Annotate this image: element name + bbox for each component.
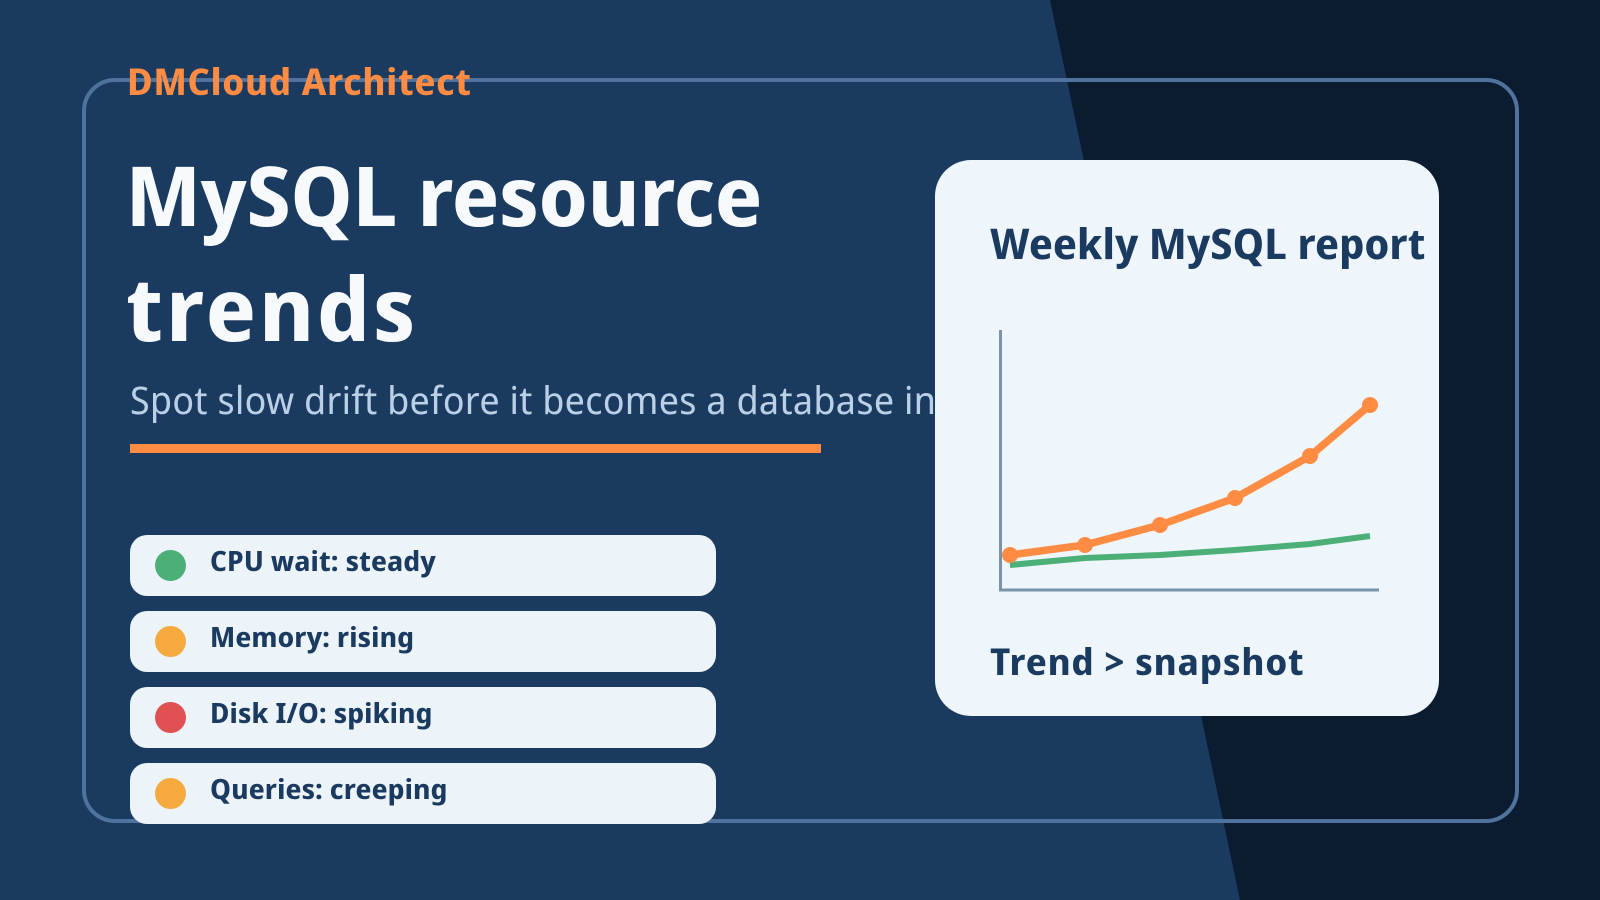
- status row: Memory: Memory: rising: [210, 618, 414, 656]
- card caption: Trend > snapshot: [990, 635, 1304, 686]
- status row: CPU wait: CPU wait: steady: [210, 542, 436, 580]
- line chart: [999, 330, 1379, 592]
- subtitle: Spot slow drift before it becomes a database incident: [130, 374, 1043, 426]
- brand label: DMCloud Architect: [127, 55, 472, 106]
- title line 2: trends: [126, 247, 418, 367]
- accent bar: [130, 444, 821, 453]
- status row: Queries: Queries: creeping: [210, 770, 448, 808]
- status row: Queries: [130, 763, 716, 824]
- status row: CPU wait: [130, 535, 716, 596]
- panel: weekly report card: [935, 160, 1439, 716]
- status row: Memory: [130, 611, 716, 672]
- card heading: Weekly MySQL report: [990, 215, 1426, 272]
- status row: Disk I/O: [130, 687, 716, 748]
- title line 1: MySQL resource: [126, 138, 762, 251]
- status row: Disk I/O: Disk I/O: spiking: [210, 694, 433, 732]
